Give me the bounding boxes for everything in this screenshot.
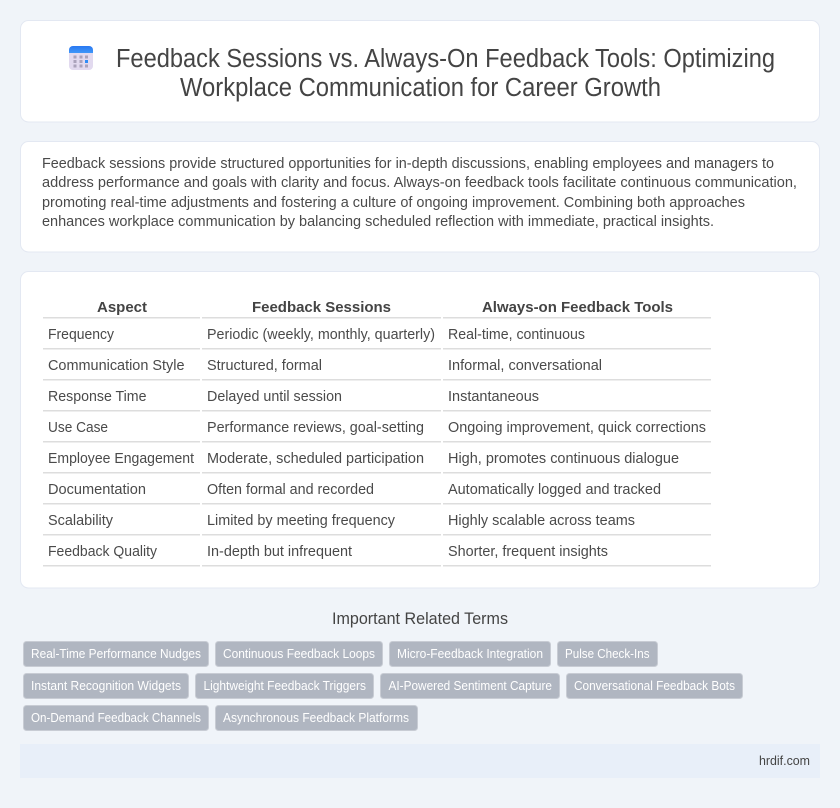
row: Frequency: Frequency [48,327,115,343]
row: Use Case: Ongoing improvement, quick corrections [448,420,706,436]
row: Employee Engagement: Employee Engagement [48,451,194,467]
text block: intro: Feedback sessions provide structured opportunities for in-depth discussions, enabling employees and managers to [42,156,774,172]
tag: Asynchronous Feedback Platforms [216,706,418,730]
row: Scalability: Scalability [48,513,114,529]
panel: intro paragraph [20,142,820,252]
row: Employee Engagement: Moderate, scheduled participation [207,451,424,467]
tag: On-Demand Feedback Channels [24,706,208,730]
title: Feedback Sessions vs. Always-On Feedback Tools: Optimizing [116,45,775,73]
icon: calendar [69,46,93,70]
tag: AI-Powered Sentiment Capture [380,674,560,698]
tag: Asynchronous Feedback Platforms: Asynchronous Feedback Platforms [223,711,409,725]
row: Scalability: Highly scalable across teams [448,513,635,529]
footer: hrdif.com [759,753,810,768]
tag: Conversational Feedback Bots: Conversational Feedback Bots [574,679,735,693]
text block: intro: address performance and goals with clarity and focus. Always-on feedback tools facilitate continuous communication, [42,175,797,191]
row: Scalability [43,513,711,536]
row: Documentation: Documentation [48,482,146,498]
text block: intro: enhances workplace communication by balancing scheduled reflection with immediate, practical insights. [42,214,714,230]
row: Response Time: Instantaneous [448,389,539,405]
row: Communication Style [43,358,711,380]
row: Communication Style: Informal, conversational [448,358,602,374]
panel: header [20,20,820,122]
table header: Feedback Sessions [252,299,391,316]
row: Feedback Quality: Shorter, frequent insights [448,544,608,560]
tag: Conversational Feedback Bots [566,674,742,698]
panel: comparison table [20,272,820,588]
row: Documentation [43,482,711,504]
row: Documentation: Often formal and recorded [207,482,374,498]
row: Use Case [43,420,711,442]
tag: Real-Time Performance Nudges: Real-Time Performance Nudges [31,647,201,661]
row: Employee Engagement: High, promotes continuous dialogue [448,451,679,467]
text block: intro: promoting real-time adjustments and fostering a culture of ongoing improvement. Combining both approaches [42,195,745,211]
row: Documentation: Automatically logged and tracked [448,482,661,498]
row: Feedback Quality: Feedback Quality [48,544,158,560]
table header [43,299,711,318]
row: Employee Engagement [43,451,711,474]
tag: Instant Recognition Widgets: Instant Recognition Widgets [31,679,181,693]
text block: intro [42,156,797,230]
tag: Continuous Feedback Loops: Continuous Feedback Loops [223,647,375,661]
heading: related terms: Important Related Terms [332,610,508,628]
row: Communication Style: Communication Style [48,358,184,374]
tag: AI-Powered Sentiment Capture: AI-Powered Sentiment Capture [388,679,552,693]
row: Use Case: Use Case [48,420,108,436]
tag: Lightweight Feedback Triggers: Lightweight Feedback Triggers [204,679,366,693]
row: Communication Style: Structured, formal [207,358,322,374]
tag: Continuous Feedback Loops [216,642,382,666]
row: Use Case: Performance reviews, goal-setting [207,420,424,436]
title: Workplace Communication for Career Growth [180,74,661,102]
footer [20,744,820,778]
row: Feedback Quality [43,544,711,566]
row: Frequency: Periodic (weekly, monthly, quarterly) [207,327,435,343]
row: Frequency: Real-time, continuous [448,327,585,343]
row: Response Time [43,389,711,412]
tag: Micro-Feedback Integration [390,642,550,666]
row: Scalability: Limited by meeting frequency [207,513,396,529]
row: Response Time: Response Time [48,389,146,405]
tag: Real-Time Performance Nudges [24,642,208,666]
row: Feedback Quality: In-depth but infrequent [207,544,352,560]
tag: Pulse Check-Ins: Pulse Check-Ins [565,647,650,661]
tag: Lightweight Feedback Triggers [196,674,374,698]
table header: Always-on Feedback Tools [482,299,673,316]
tag: On-Demand Feedback Channels: On-Demand Feedback Channels [31,711,201,725]
tag: Pulse Check-Ins [558,642,658,666]
title [116,45,775,102]
table header: Aspect [97,299,147,316]
row: Response Time: Delayed until session [207,389,342,405]
tag: Instant Recognition Widgets [24,674,188,698]
panel: related term tags [24,642,742,730]
tag: Micro-Feedback Integration: Micro-Feedback Integration [397,647,543,661]
row: Frequency [43,327,711,350]
